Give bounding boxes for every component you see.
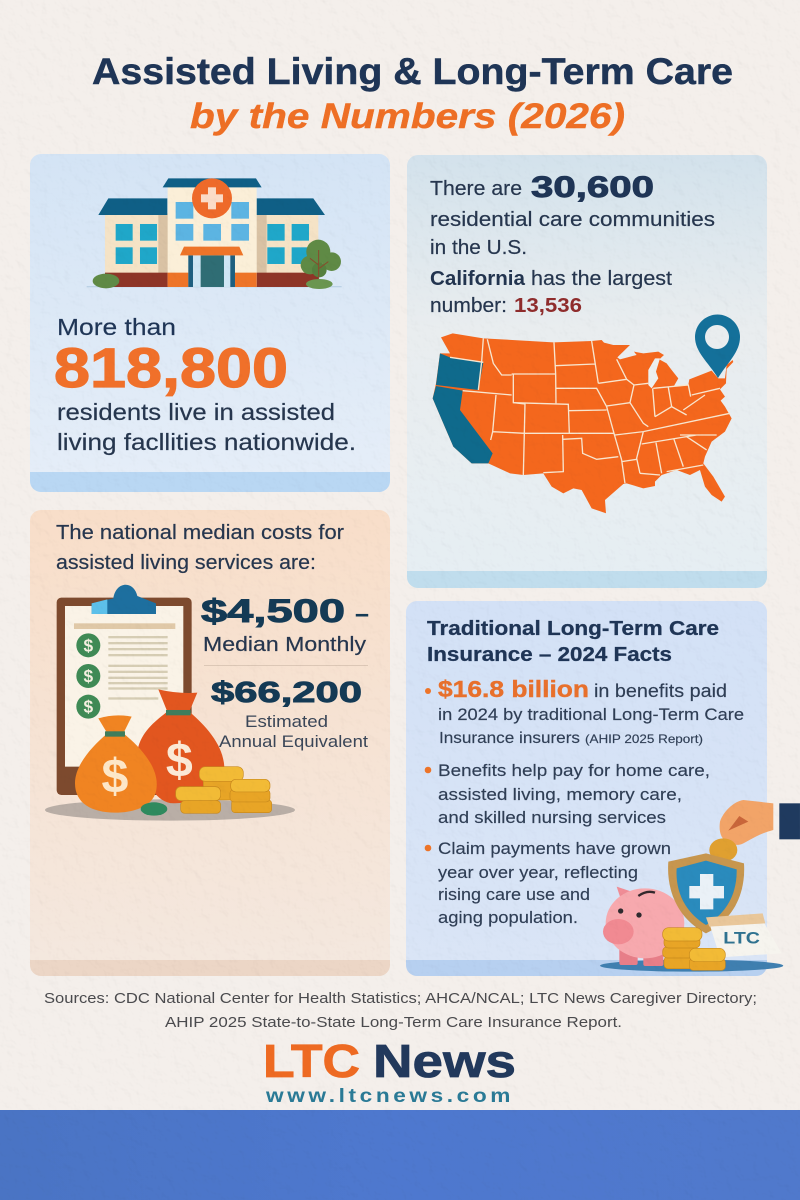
stat: annual equivalent xyxy=(211,677,368,751)
bullet: claim growth xyxy=(425,839,671,927)
bullet: claim growth: year over year, reflecting xyxy=(438,863,638,882)
sources: Sources: CDC National Center for Health Statistics; AHCA/NCAL; LTC News Caregiver Directory; xyxy=(44,990,757,1007)
sources: AHIP 2025 State-to-State Long-Term Care Insurance Report. xyxy=(165,1014,622,1031)
logo: LTC News: LTC xyxy=(263,1035,360,1087)
title: Assisted Living & Long-Term Care xyxy=(92,51,733,92)
icon: clipboard and money bags: $ xyxy=(84,666,94,686)
bullet: benefits paid: $16.8 billion xyxy=(438,676,589,702)
text: community counts: 30,600 xyxy=(531,171,654,204)
icon: clipboard and money bags: $ xyxy=(84,697,94,717)
stat: median monthly: Median Monthly xyxy=(203,634,366,656)
icon: piggy bank, shield and LTC calendar xyxy=(600,800,800,972)
bullet: claim growth: Claim payments have grown xyxy=(438,839,671,858)
text: costs intro: The national median costs for xyxy=(56,522,344,544)
panel: residents xyxy=(30,154,390,492)
panel: insurance facts xyxy=(406,601,800,976)
logo: LTC News: News xyxy=(373,1035,516,1087)
icon: piggy bank, shield and LTC calendar: LTC xyxy=(723,928,760,947)
map: United States xyxy=(433,333,733,513)
text: community counts xyxy=(430,171,715,317)
footer band xyxy=(0,1110,800,1200)
panel: median costs xyxy=(30,510,390,976)
icon: clipboard and money bags: $ xyxy=(102,750,129,804)
bullet: benefits paid: in 2024 by traditional Long-Term Care xyxy=(438,705,744,724)
stat: annual equivalent: Estimated xyxy=(245,712,328,731)
text: community counts: 13,536 xyxy=(514,295,582,317)
text: residents description: residents live in assisted xyxy=(57,399,335,425)
bullet: what benefits cover: and skilled nursing services xyxy=(438,808,666,827)
title xyxy=(92,51,733,136)
stat: median monthly xyxy=(201,593,369,656)
icon: clipboard and money bags xyxy=(45,585,295,821)
text: more than: More than xyxy=(57,314,176,340)
logo: LTC News xyxy=(263,1035,516,1107)
text: community counts: California xyxy=(430,268,526,290)
bullet: benefits paid xyxy=(425,676,744,747)
bullet: claim growth: aging population. xyxy=(438,908,578,927)
text: community counts: has the largest xyxy=(531,268,672,290)
panel: communities map xyxy=(407,155,767,588)
stat: median monthly: – xyxy=(355,598,369,628)
heading: insurance facts xyxy=(427,618,719,666)
heading: insurance facts: Insurance – 2024 Facts xyxy=(427,644,672,666)
bullet: what benefits cover: Benefits help pay for home care, xyxy=(438,761,710,780)
stat: annual equivalent: $66,200 xyxy=(211,677,362,709)
text: costs intro xyxy=(56,522,344,574)
bullet: what benefits cover xyxy=(425,761,710,827)
logo: LTC News: www.ltcnews.com xyxy=(265,1086,514,1107)
text: community counts: in the U.S. xyxy=(430,237,527,259)
icon: clipboard and money bags: $ xyxy=(166,734,193,788)
icon: hospital building xyxy=(87,178,342,289)
heading: insurance facts: Traditional Long-Term Care xyxy=(427,618,719,640)
text: residents description xyxy=(57,399,356,455)
bullet: claim growth: rising care use and xyxy=(438,885,590,904)
icon: clipboard and money bags: $ xyxy=(84,635,94,655)
stat: median monthly: $4,500 xyxy=(201,593,345,629)
stat: 818,800: 818,800 xyxy=(54,336,288,399)
text: community counts: number: xyxy=(430,295,507,317)
text: costs intro: assisted living services are: xyxy=(56,552,316,574)
title: by the Numbers (2026) xyxy=(190,97,625,136)
icon: location pin xyxy=(695,314,740,378)
stat: annual equivalent: Annual Equivalent xyxy=(219,732,368,751)
bullet: what benefits cover: assisted living, memory care, xyxy=(438,785,682,804)
text: residents description: living facllities nationwide. xyxy=(57,429,356,455)
sources xyxy=(44,990,757,1031)
text: community counts: residential care communities xyxy=(430,209,715,231)
text: community counts: There are xyxy=(430,178,522,200)
bullet: benefits paid: (AHIP 2025 Report) xyxy=(585,732,703,746)
bullet: benefits paid: in benefits paid xyxy=(594,681,727,701)
bullet: benefits paid: Insurance insurers xyxy=(439,730,580,747)
